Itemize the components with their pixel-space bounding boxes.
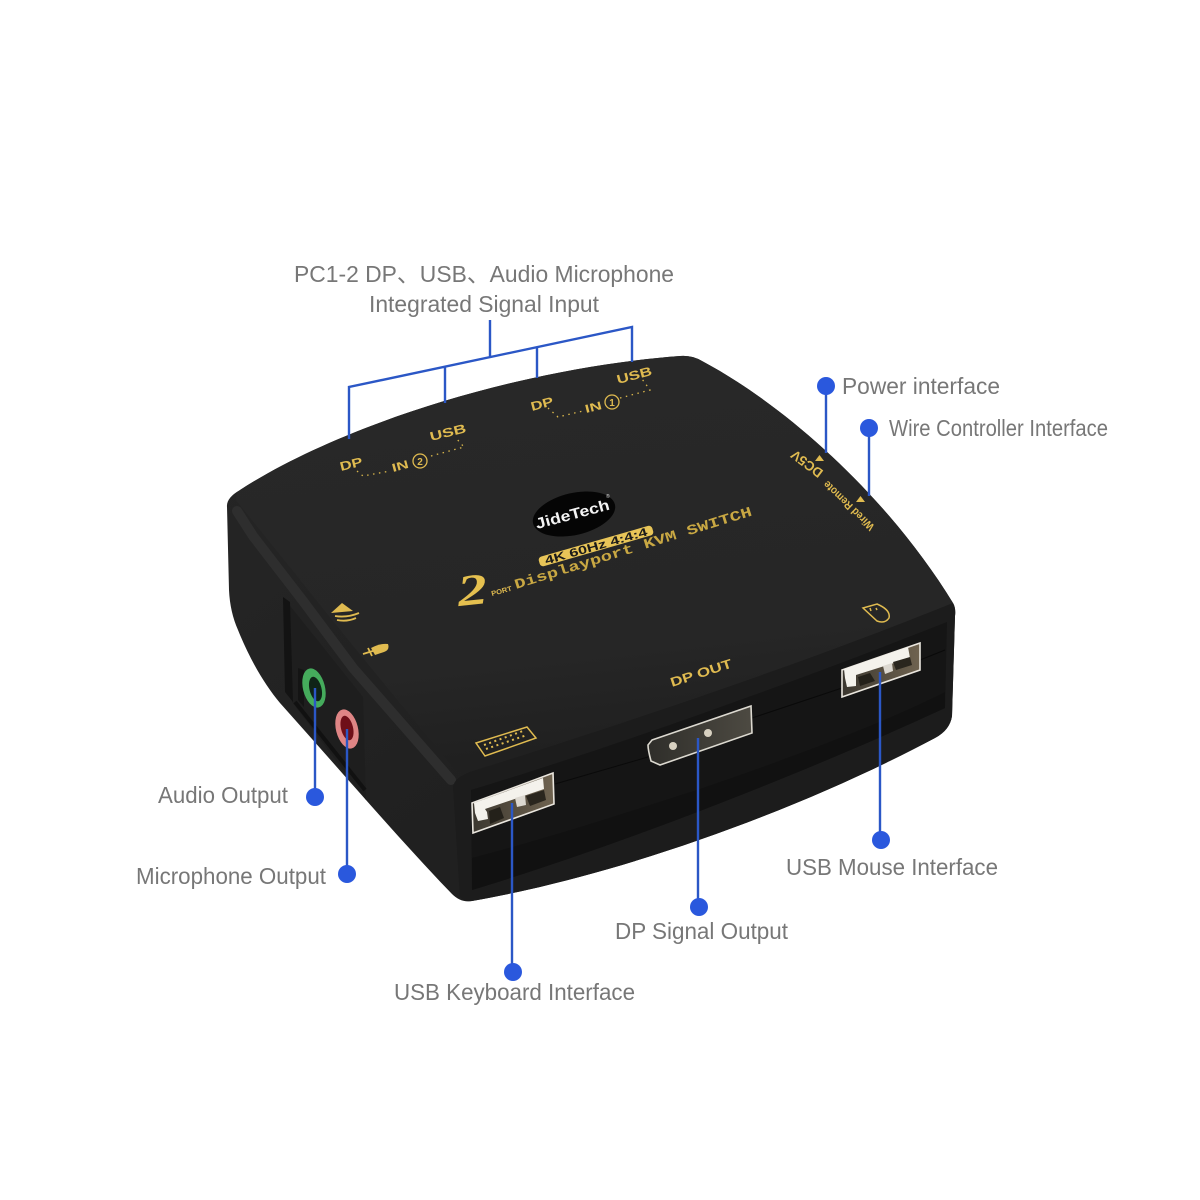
red microphone jack	[331, 707, 363, 751]
input 1 markings: USB	[615, 364, 654, 387]
product: KVM switch body	[227, 356, 955, 901]
front recess	[471, 622, 947, 890]
input 2 markings: DP	[338, 455, 364, 474]
power and remote markings: Wired Remote	[821, 478, 877, 532]
green audio jack	[298, 666, 330, 710]
power and remote markings: DC5V	[788, 447, 826, 481]
spec badge	[538, 525, 655, 569]
callout: integrated signal input	[294, 261, 674, 439]
callout: integrated signal input: PC1-2 DP、USB、Audio Microphone	[294, 261, 674, 287]
callout: USB keyboard interface	[394, 803, 635, 1005]
callout: DP signal output	[615, 738, 789, 944]
callout: USB mouse interface: USB Mouse Interface	[786, 854, 998, 880]
callout: microphone output	[136, 729, 356, 889]
callout: microphone output: Microphone Output	[136, 863, 327, 889]
left side recess with audio ports	[283, 597, 366, 800]
left chamfer highlight	[237, 511, 451, 780]
product name: 2	[454, 564, 490, 616]
callout: wire controller interface	[860, 415, 1108, 496]
DP OUT label: DP OUT	[668, 656, 734, 690]
brand logo: JideTech	[534, 497, 611, 533]
product name: PORT	[491, 586, 514, 598]
front face	[453, 603, 955, 901]
product name: Displayport KVM SWITCH	[513, 505, 754, 594]
callout: audio output	[158, 688, 324, 808]
callout: power interface: Power interface	[842, 373, 1000, 399]
brand logo	[528, 484, 620, 544]
icon: microphone	[363, 644, 388, 656]
input 1 markings	[529, 364, 654, 417]
body silhouette	[227, 356, 955, 901]
spec badge: 4K 60Hz 4:4:4	[544, 526, 650, 567]
USB keyboard port	[472, 773, 554, 833]
input 1 markings: 1	[609, 398, 615, 409]
callout: integrated signal input: Integrated Signal Input	[369, 291, 600, 317]
input 2 markings: USB	[428, 421, 468, 444]
brand logo: ®	[606, 493, 610, 500]
icon: mouse	[863, 604, 889, 622]
DP output port	[648, 706, 752, 765]
callout: USB mouse interface	[786, 672, 998, 880]
input 1 markings: IN	[584, 400, 603, 416]
callout: USB keyboard interface: USB Keyboard Interface	[394, 979, 635, 1005]
top face	[236, 356, 953, 773]
product name	[454, 505, 754, 616]
input 2 markings	[338, 421, 468, 476]
input 2 markings: 2	[417, 457, 423, 468]
callout: wire controller interface: Wire Controller Interface	[889, 415, 1108, 441]
icon: speaker	[331, 603, 359, 621]
front recess lower strip	[472, 692, 945, 890]
callout: DP signal output: DP Signal Output	[615, 918, 789, 944]
callout: audio output: Audio Output	[158, 782, 289, 808]
power and remote markings	[788, 447, 877, 532]
icon: keyboard	[476, 727, 536, 756]
USB mouse port	[842, 643, 920, 697]
input 1 markings: DP	[529, 394, 555, 414]
input 2 markings: IN	[391, 459, 410, 475]
callout: power interface	[817, 373, 1000, 453]
